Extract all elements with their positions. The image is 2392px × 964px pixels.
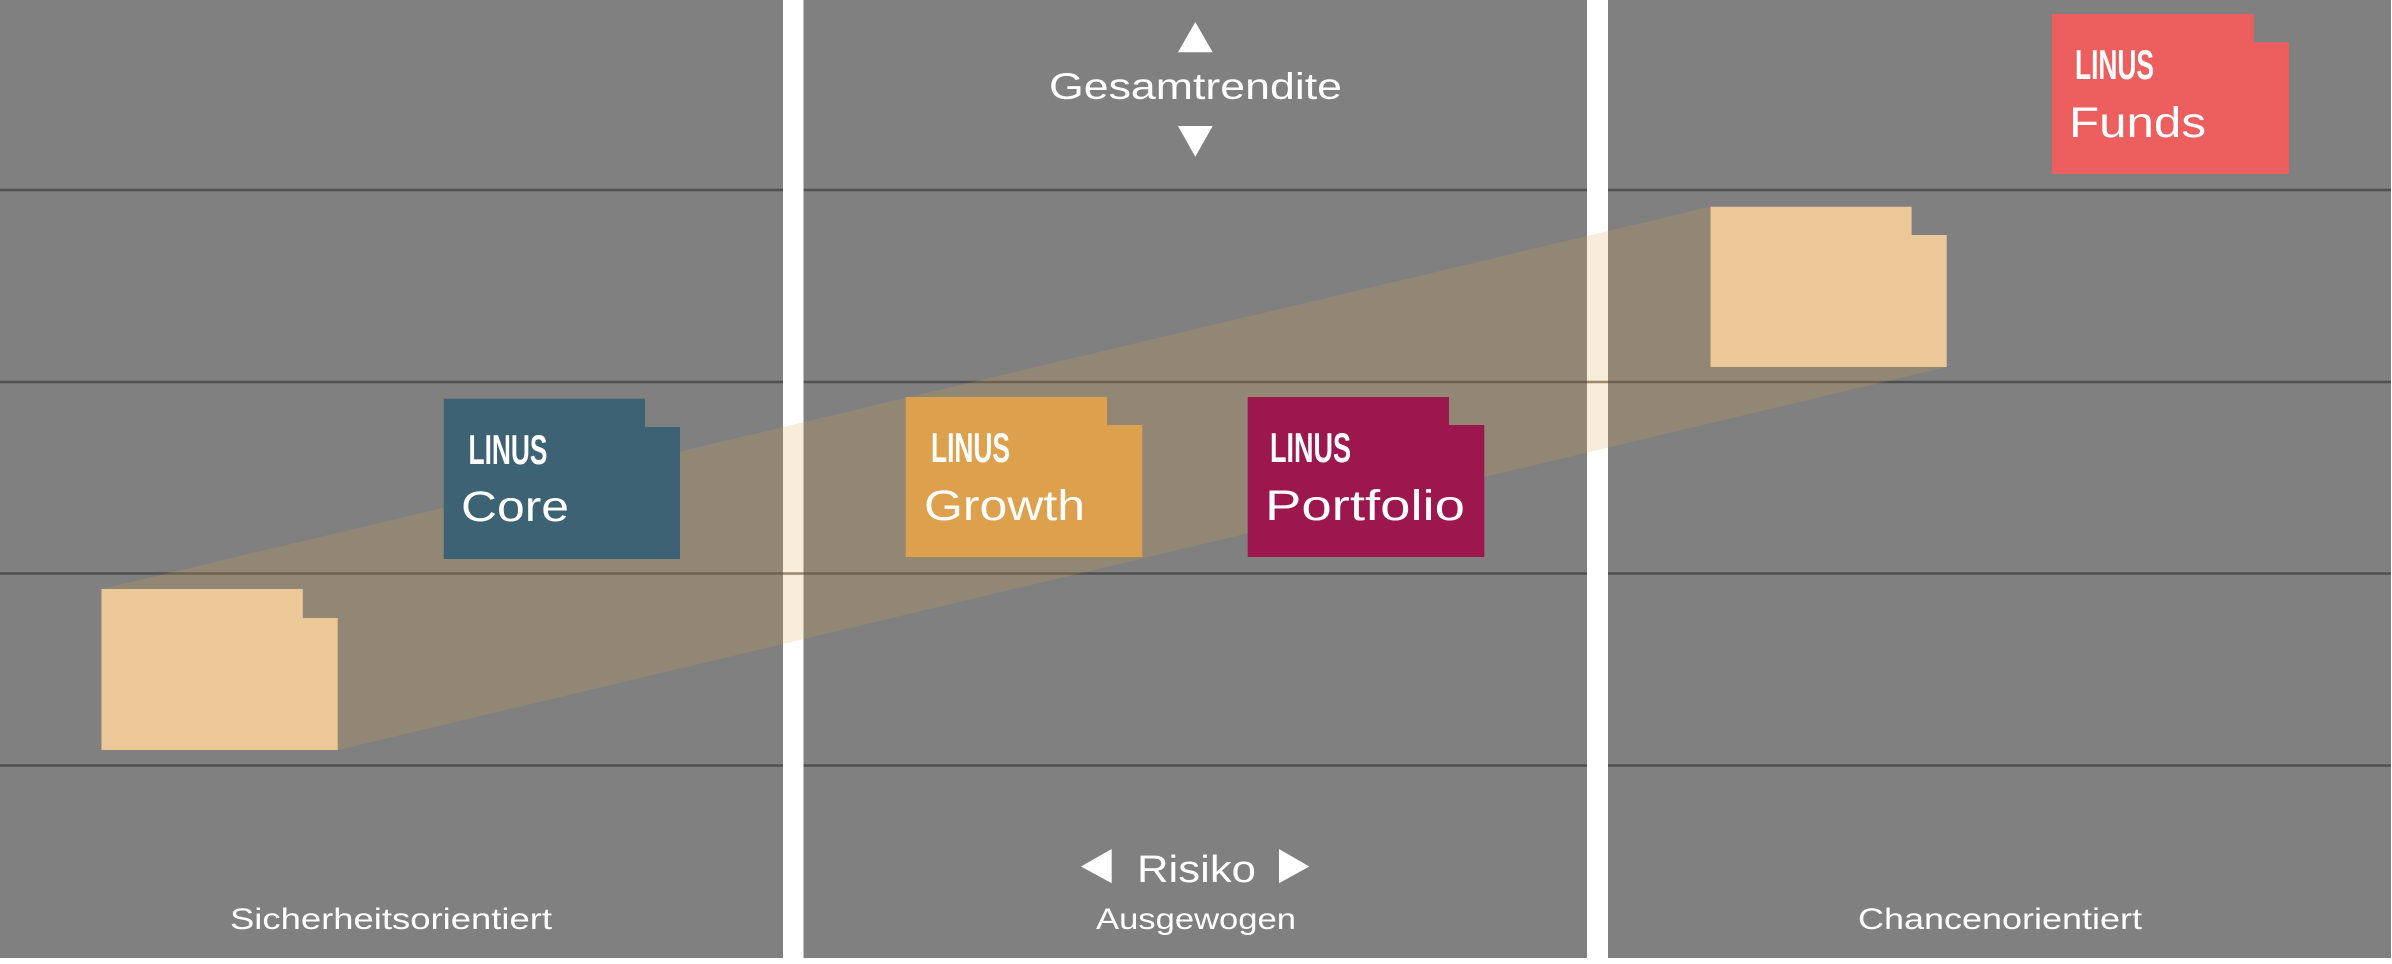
brand label: LINUS Funds: LINUS: [2075, 41, 2154, 88]
folder: LINUS Growth: [906, 397, 1142, 557]
axis: Risiko: [1081, 849, 1309, 891]
background panel: Ausgewogen: [804, 0, 1587, 958]
icon: arrow right: [1279, 849, 1309, 883]
folder: LINUS Portfolio: [1248, 397, 1484, 557]
column label: Chancenorientiert: Chancenorientiert: [1858, 903, 2143, 936]
product name: Growth: Growth: [924, 482, 1085, 530]
translucent rising band between the placeholder folders: [102, 207, 1947, 750]
background panel: Sicherheitsorientiert: [0, 0, 783, 958]
background panel: Chancenorientiert: [1608, 0, 2391, 958]
folder: LINUS Funds: [2052, 14, 2289, 174]
product name: Portfolio: Portfolio: [1265, 482, 1465, 530]
brand label: LINUS Growth: LINUS: [931, 424, 1010, 471]
product name: Core: Core: [461, 483, 569, 531]
icon: arrow up: [1178, 22, 1213, 52]
icon: arrow left: [1081, 849, 1112, 883]
product name: Funds: Funds: [2069, 99, 2206, 147]
placeholder folder: upper right: [1710, 207, 1947, 367]
axis label: Gesamtrendite: Gesamtrendite: [1049, 66, 1342, 107]
brand label: LINUS Core: LINUS: [468, 426, 548, 473]
column label: Sicherheitsorientiert: Sicherheitsorientiert: [230, 903, 553, 936]
placeholder folder: lower left: [102, 589, 338, 750]
axis: Gesamtrendite: [1049, 22, 1342, 157]
axis label: Risiko: Risiko: [1137, 849, 1256, 891]
column label: Ausgewogen: Ausgewogen: [1096, 903, 1296, 936]
folder: LINUS Core: [444, 399, 680, 559]
icon: arrow down: [1178, 126, 1213, 157]
brand label: LINUS Portfolio: LINUS: [1270, 424, 1351, 471]
